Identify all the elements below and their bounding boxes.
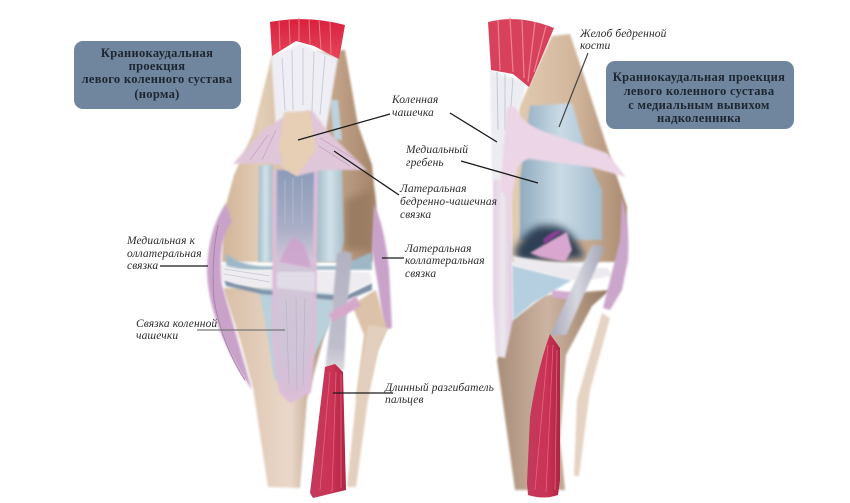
- title box: normal: (норма): [134, 87, 180, 101]
- femur right: [510, 34, 627, 262]
- band over tendon left: [329, 296, 361, 322]
- extensor muscle left: [310, 364, 346, 498]
- title box: normal: Краниокаудальная: [101, 46, 213, 60]
- title box: luxation: Краниокаудальная проекция: [613, 70, 785, 84]
- label: patella: чашечка: [392, 107, 434, 119]
- fibula left: [347, 325, 387, 487]
- label: medial collateral ligament: Медиальная к: [127, 235, 195, 247]
- fibula right: [574, 313, 610, 476]
- extensor tendon left: [325, 252, 352, 370]
- lateral collateral ligament left: [372, 204, 392, 330]
- medial collateral ligament left: [207, 203, 252, 390]
- trochlear cartilage left strip: [258, 165, 273, 262]
- panel: right knee, medial luxation: [488, 18, 628, 498]
- quadriceps muscle right: [488, 19, 554, 87]
- patellar ligament left: [272, 170, 318, 403]
- groove below meniscus: [224, 280, 372, 301]
- label: long digital extensor: пальцев: [385, 394, 424, 406]
- cruciate fan through ligament: [279, 236, 312, 268]
- tibia cartilage lateral: [309, 288, 336, 365]
- label: lateral collateral ligament: Латеральная: [405, 243, 472, 255]
- label: medial collateral ligament: оллатеральная: [127, 248, 202, 260]
- extensor muscle right: [527, 334, 560, 498]
- label: medial ridge: гребень: [406, 157, 444, 169]
- quadriceps tendon right: [490, 70, 526, 180]
- meniscus over ligament: [277, 272, 315, 292]
- label: patellar ligament: Связка коленной: [136, 318, 217, 330]
- label: femoral groove: кости: [580, 40, 611, 52]
- right condyle shading: [345, 190, 372, 250]
- title box: luxation: [606, 61, 794, 129]
- label: medial collateral ligament: связка: [127, 260, 158, 272]
- label: lateral collateral ligament: коллатеральная: [405, 255, 485, 267]
- label: lateral femoropatellar ligament: Латеральная: [400, 183, 467, 195]
- retinaculum left: [233, 110, 367, 176]
- label: patella: Коленная: [392, 94, 438, 106]
- tibia cartilage medial: [258, 288, 290, 395]
- tibia left: [223, 285, 335, 488]
- femur left: [222, 50, 376, 262]
- label: lateral collateral ligament: связка: [405, 268, 436, 280]
- leader lines: [160, 53, 588, 393]
- panel: left knee, normal: [207, 18, 392, 498]
- meniscus band left: [221, 264, 372, 295]
- meniscus band right: [512, 256, 612, 280]
- label: lateral femoropatellar ligament: связка: [400, 209, 431, 221]
- patellar tendon right: [493, 105, 513, 358]
- joint shadow right: [514, 226, 585, 262]
- quadriceps tendon left: [271, 44, 338, 130]
- trochlear cartilage right: [520, 103, 602, 240]
- extensor tendon right: [550, 245, 604, 335]
- title box: luxation: надколенника: [657, 111, 741, 125]
- label: patellar ligament: чашечки: [136, 330, 178, 342]
- label: long digital extensor: Длинный разгибатель: [385, 382, 494, 394]
- fibular head left: [352, 290, 387, 400]
- patella left: [279, 111, 316, 176]
- tibia right: [497, 290, 610, 490]
- label: lateral femoropatellar ligament: бедренно-чашечная: [400, 196, 497, 208]
- trochlear cartilage right strip: [316, 165, 344, 262]
- cartilage above meniscus: [226, 252, 372, 270]
- upper cartilage strip left: [330, 100, 342, 140]
- title box: normal: левого коленного сустава: [82, 72, 233, 86]
- label: femoral groove: Желоб бедренной: [580, 28, 666, 40]
- quadriceps muscle left: [270, 19, 345, 59]
- lateral ligament right: [603, 198, 628, 310]
- title box: normal: [74, 41, 241, 109]
- cruciate ligament right: [530, 232, 572, 262]
- retinaculum right: [500, 107, 626, 200]
- medial band right: [552, 290, 578, 301]
- title box: luxation: левого коленного сустава: [624, 84, 775, 98]
- title box: luxation: с медиальным вывихом: [628, 98, 770, 112]
- cruciate ligament left: [276, 231, 314, 262]
- tibia cartilage right: [512, 265, 572, 320]
- title box: normal: проекция: [129, 59, 185, 73]
- label: medial ridge: Медиальный: [406, 144, 468, 156]
